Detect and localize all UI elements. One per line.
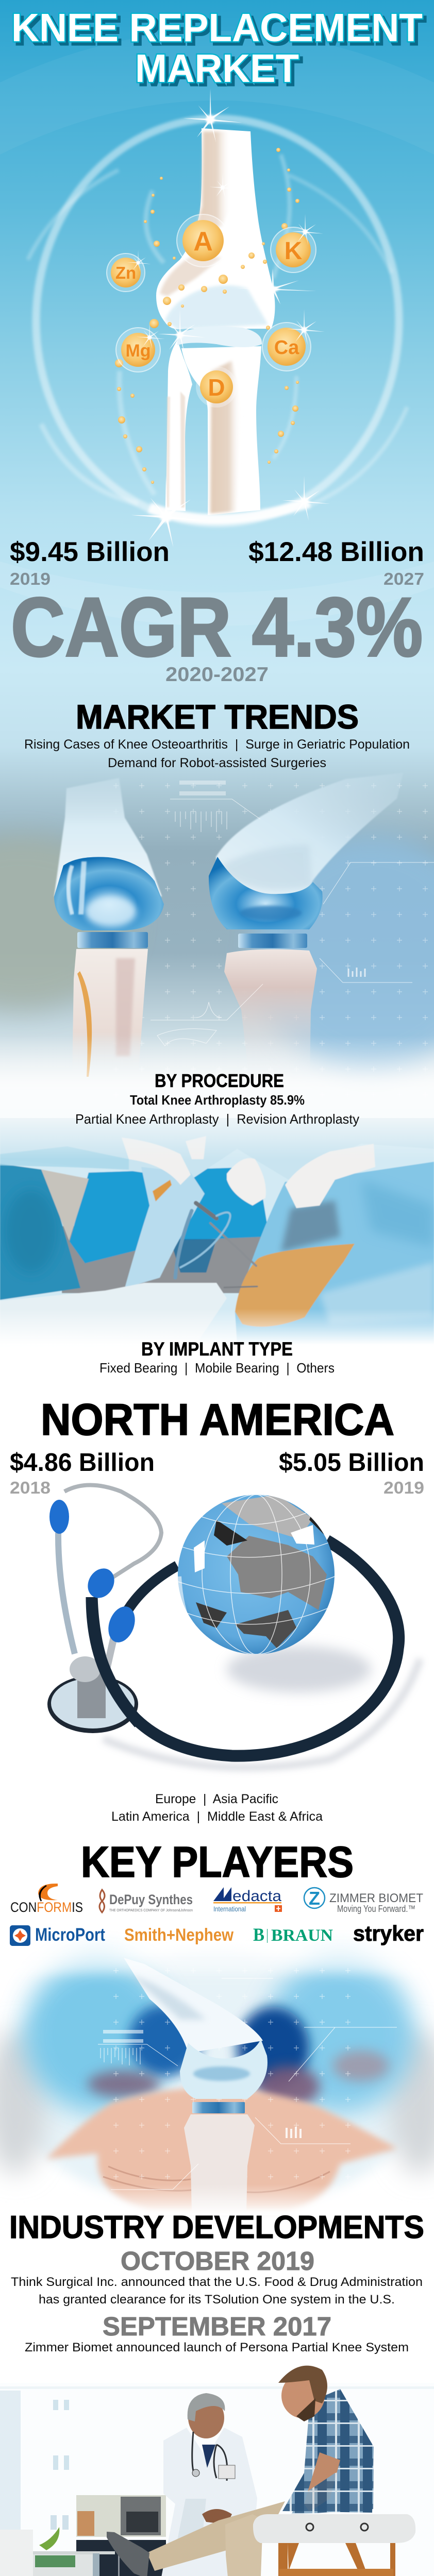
patient arm	[304, 2452, 340, 2512]
2019 value: 2019	[10, 569, 51, 588]
september 2017: SEPTEMBER 2017	[103, 2312, 331, 2341]
instruments	[175, 1203, 257, 1287]
logo: MicroPort	[10, 1925, 105, 1946]
room	[0, 2383, 434, 2576]
by procedure: Total Knee Arthroplasty 85.9%	[130, 1092, 305, 1108]
logo: Zimmer Biomet: ZIMMER BIOMET	[329, 1891, 423, 1905]
palms	[46, 2088, 397, 2210]
doctor and patient photo	[0, 2366, 434, 2576]
logo: Medacta	[213, 1887, 282, 1913]
by procedure	[75, 1070, 359, 1127]
october 2019	[11, 2246, 423, 2307]
surgery photo	[0, 1118, 434, 1345]
patient drape	[235, 1162, 434, 1345]
implant cap	[180, 2039, 268, 2099]
market trends text: Rising Cases of Knee Osteoarthritis | Surge in Geriatric Population	[24, 737, 410, 752]
floor	[62, 1226, 268, 1293]
market trends text	[24, 698, 410, 770]
capsule K	[271, 227, 316, 273]
logo: Zimmer Biomet	[304, 1888, 423, 1914]
right tray	[238, 934, 307, 948]
key players heading: KEY PLAYERS	[81, 1838, 354, 1886]
logo: DePuy Synthes: DePuy Synthes	[109, 1892, 193, 1907]
heading: INDUSTRY DEVELOPMENTS	[9, 2210, 424, 2245]
2027 value: $12.48 Billion	[248, 537, 424, 567]
september 2017	[25, 2312, 409, 2354]
redraw dark tube on chest piece	[92, 1597, 139, 1723]
other regions: Europe | Asia Pacific	[155, 1792, 278, 1806]
knee implants illustration	[0, 773, 434, 1121]
implant femur	[124, 1958, 263, 2053]
capsule A: A	[193, 227, 213, 257]
left implant femur	[54, 778, 162, 896]
gloves	[0, 1136, 375, 1345]
logo: Smith+Nephew: Smith+Nephew	[124, 1925, 233, 1945]
right implant femur	[216, 773, 403, 902]
market trends text: Demand for Robot-assisted Surgeries	[108, 756, 326, 770]
north america	[10, 1395, 424, 1497]
patient	[107, 2366, 374, 2576]
title	[11, 6, 426, 94]
other regions: Latin America | Middle East & Africa	[111, 1809, 323, 1824]
capsule K: K	[285, 238, 303, 265]
implant tibia	[184, 2114, 255, 2213]
hands with knee implant photo	[0, 1942, 434, 2215]
market trends text: MARKET TRENDS	[76, 698, 359, 736]
droplets	[115, 148, 299, 484]
north america: 2018	[10, 1478, 51, 1497]
logo: B. Braun: BRAUN	[271, 1926, 333, 1945]
raised shoe	[107, 2532, 149, 2576]
silver headset	[64, 1485, 161, 1578]
capsule D	[196, 366, 237, 408]
logo: ConforMIS: CONFORMIS	[10, 1900, 83, 1915]
shadows	[227, 1646, 371, 1692]
title: MARKET	[135, 46, 299, 91]
by procedure: Partial Knee Arthroplasty | Revision Arthroplasty	[75, 1111, 359, 1127]
2027 value	[248, 537, 424, 588]
dark tube	[92, 1540, 399, 1756]
2019 value: $9.45 Billion	[10, 537, 170, 567]
hero knee illustration	[28, 89, 407, 548]
bottom glow	[149, 502, 309, 519]
october 2019: Think Surgical Inc. announced that the U.S. Food & Drug Administration	[11, 2275, 423, 2289]
desk and plant	[0, 2527, 115, 2576]
left metal cap	[54, 857, 164, 930]
patient raised leg	[147, 2501, 285, 2571]
beige wall	[41, 1170, 89, 1241]
femur bone	[156, 128, 275, 329]
october 2019: OCTOBER 2019	[121, 2246, 314, 2276]
logo: Stryker: stryker	[353, 1921, 424, 1945]
logo: B. Braun: B	[253, 1924, 264, 1945]
glowing halo rings	[28, 118, 407, 523]
patient lower leg	[225, 2514, 263, 2576]
stethoscope and globe	[47, 1485, 420, 1768]
logo: Medacta: International	[213, 1905, 246, 1913]
by procedure: BY PROCEDURE	[155, 1070, 284, 1091]
september 2017: Zimmer Biomet announced launch of Persona Partial Knee System	[25, 2341, 409, 2354]
logo: Zimmer Biomet: Moving You Forward.™	[337, 1904, 415, 1914]
implant tray	[192, 2102, 245, 2113]
table	[70, 1167, 269, 1263]
other regions	[111, 1792, 323, 1824]
upper gown	[1, 1151, 329, 1179]
doctor	[156, 2393, 257, 2576]
2027 value: 2027	[383, 569, 424, 588]
sparkles	[127, 89, 330, 548]
north america: NORTH AMERICA	[41, 1395, 394, 1445]
october 2019: has granted clearance for its TSolution One system in the U.S.	[39, 2293, 395, 2307]
capsule Ca	[262, 323, 311, 371]
globe	[178, 1495, 335, 1654]
north america: 2019	[383, 1478, 424, 1497]
left gown	[0, 1164, 80, 1300]
capsule Ca: Ca	[274, 337, 299, 359]
title: KNEE REPLACEMENT	[11, 6, 423, 50]
knee	[235, 1244, 355, 1327]
tibia bone	[181, 346, 261, 515]
north america: $4.86 Billion	[10, 1449, 155, 1477]
cabinet	[76, 2495, 166, 2576]
capsule Zn: Zn	[115, 263, 136, 282]
logo: DePuy Synthes	[99, 1890, 193, 1912]
capsule D: D	[208, 374, 225, 401]
right tibia	[224, 949, 317, 1077]
logo: MicroPort: MicroPort	[35, 1925, 105, 1945]
by implant type: BY IMPLANT TYPE	[141, 1338, 293, 1360]
sterile bag	[125, 1167, 205, 1288]
capsule Zn	[107, 253, 145, 292]
logo: B. Braun	[253, 1924, 333, 1945]
hud graphics	[98, 1978, 397, 2190]
left tray	[77, 932, 148, 948]
logo: Zimmer Biomet: Z	[309, 1888, 320, 1909]
capsule Mg: Mg	[125, 341, 151, 361]
title: MARKET	[138, 49, 302, 94]
mineral capsules	[107, 214, 316, 408]
capsule Mg	[116, 328, 160, 372]
title: KNEE REPLACEMENT	[14, 9, 426, 53]
CAGR: 2020-2027	[165, 664, 269, 686]
north america: $5.05 Billion	[279, 1449, 424, 1477]
blue ear tips	[49, 1500, 69, 1534]
logo: ConforMIS	[10, 1884, 83, 1915]
fibula bone	[166, 340, 192, 511]
treatment table	[253, 2514, 415, 2576]
logo: Medacta: edacta	[232, 1888, 281, 1905]
by implant type: Fixed Bearing | Mobile Bearing | Others	[99, 1360, 335, 1376]
right metal cap	[209, 857, 323, 929]
hud lines	[151, 799, 434, 1046]
industry developments	[9, 2210, 424, 2354]
logo: DePuy Synthes: THE ORTHOPAEDICS COMPANY OF Johnson&Johnson	[109, 1909, 193, 1912]
capsule A	[177, 214, 229, 267]
by implant type	[99, 1338, 335, 1376]
left tibia	[72, 949, 148, 1077]
chest piece	[47, 1675, 138, 1733]
meniscus	[177, 327, 262, 347]
2019 value	[10, 537, 170, 588]
market size stats	[10, 537, 424, 686]
